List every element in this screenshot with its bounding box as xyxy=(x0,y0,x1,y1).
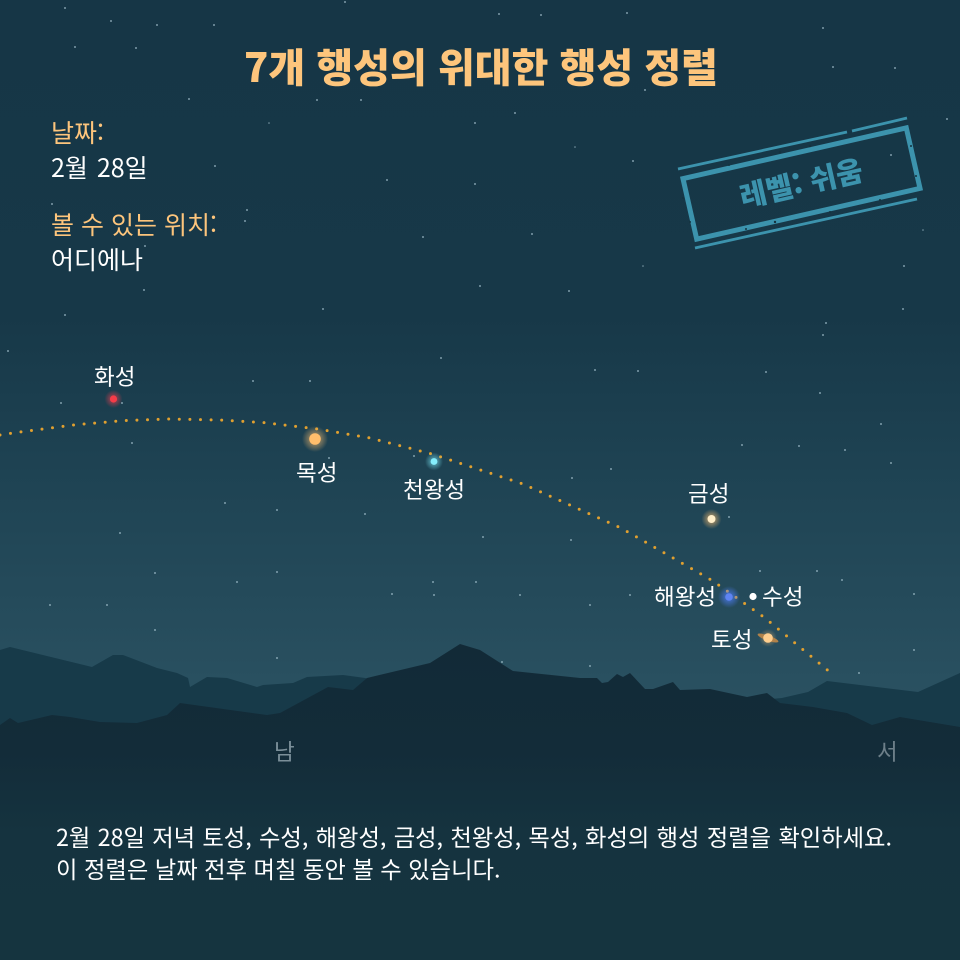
visibility info xyxy=(51,206,217,277)
label: Saturn: 토성 xyxy=(711,623,752,655)
stars xyxy=(7,1,948,674)
ecliptic dotted path xyxy=(0,419,831,673)
mountains: near ridge xyxy=(0,644,960,960)
label: Neptune: 해왕성 xyxy=(654,580,716,612)
label: Jupiter: 목성 xyxy=(296,456,337,488)
visibility label: 볼 수 있는 위치: xyxy=(51,206,217,242)
direction: west: 서 xyxy=(877,735,898,767)
label: Mars: 화성 xyxy=(94,360,135,392)
stamp: level easy xyxy=(678,118,920,248)
planet: Neptune xyxy=(718,586,740,608)
visibility value: 어디에나 xyxy=(51,241,143,277)
planet: Jupiter xyxy=(302,426,328,452)
label: Mercury: 수성 xyxy=(762,580,803,612)
description: 2월 28일 저녁 토성, 수성, 해왕성, 금성, 천왕성, 목성, 화성의 행성 정렬을 확인하세요. xyxy=(56,819,892,853)
planet: Saturn xyxy=(757,629,779,647)
stamp text: 레벨: 쉬움 xyxy=(735,148,867,216)
mountains: far ridge xyxy=(0,647,960,760)
planet: Mercury xyxy=(749,593,757,600)
date info xyxy=(51,114,148,185)
description: 이 정렬은 날짜 전후 며칠 동안 볼 수 있습니다. xyxy=(56,851,500,885)
planet: Uranus xyxy=(425,452,443,470)
description xyxy=(56,819,892,885)
date label: 날짜: xyxy=(51,114,104,150)
sky background xyxy=(0,0,960,720)
title: 7개 행성의 위대한 행성 정렬 xyxy=(244,36,718,94)
label: Venus: 금성 xyxy=(688,477,729,509)
label: Uranus: 천왕성 xyxy=(403,473,465,505)
planet: Mars xyxy=(104,390,122,408)
date value: 2월 28일 xyxy=(51,149,148,185)
planet: Venus xyxy=(702,509,722,529)
direction: south: 남 xyxy=(274,735,295,767)
